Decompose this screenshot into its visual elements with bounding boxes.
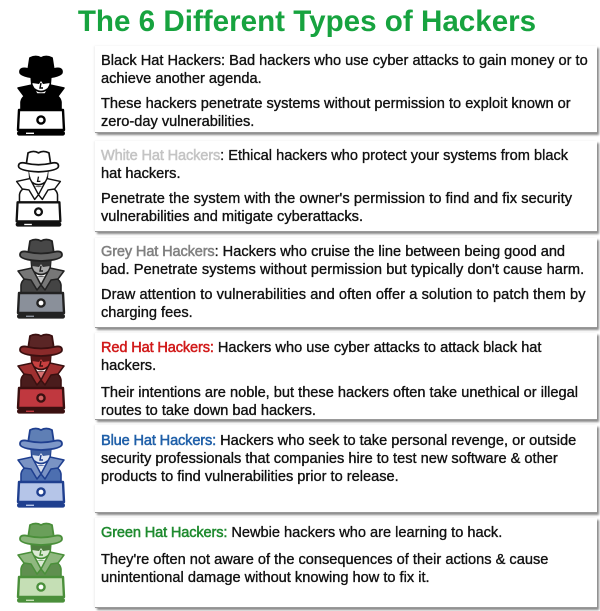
text: blue hat description: products to find vulnerabilities prior to release.: [101, 469, 399, 485]
text: black hat methods: [101, 96, 571, 130]
text: black hat description: [101, 53, 588, 87]
icon: black hacker: [16, 56, 66, 136]
icon: blue hacker: [16, 428, 66, 508]
icon: green hacker: [16, 522, 66, 603]
text: red hat methods: routes to take down bad hackers.: [101, 403, 316, 419]
text: grey hat description: bad. Penetrate systems without permission but typically don't cause harm.: [101, 262, 584, 278]
text: red hat methods: [101, 385, 578, 419]
panel: blue hat: [95, 425, 597, 513]
text: white hat methods: Penetrate the system with the owner's permission to find and fix security: [101, 191, 572, 207]
text: white hat description: [100, 148, 568, 182]
text: grey hat methods: charging fees.: [101, 305, 193, 321]
text: blue hat description: Blue Hat Hackers: Hackers who seek to take personal revenge, or outside: [101, 433, 576, 449]
text: red hat description: [101, 340, 542, 374]
text: grey hat description: [101, 244, 584, 278]
text: green hat methods: They're often not aware of the consequences of their actions & cause: [101, 552, 548, 568]
text: blue hat description: security professionals that companies hire to test new software & other: [101, 451, 558, 467]
text: black hat methods: These hackers penetrate systems without permission to exploit known or: [101, 96, 571, 112]
icon: white hacker: [16, 150, 62, 227]
title: The 6 Different Types of Hackers: [78, 5, 536, 38]
text: blue hat description: [101, 433, 576, 485]
text: grey hat methods: [101, 287, 586, 321]
panel: white hat: [95, 141, 597, 232]
text: green hat methods: unintentional damage without knowing how to fix it.: [101, 570, 430, 586]
text: white hat description: White Hat Hackers: Ethical hackers who protect your systems from black: [101, 148, 568, 164]
text: grey hat methods: Draw attention to vulnerabilities and often offer a solution to patch them by: [101, 287, 586, 303]
panel: green hat: [95, 518, 597, 608]
text: red hat description: hackers.: [101, 358, 156, 374]
panel: black hat: [95, 46, 597, 133]
text: grey hat description: Grey Hat Hackers: Hackers who cruise the line between being good and: [101, 244, 565, 260]
text: white hat description: hat hackers.: [101, 166, 180, 182]
text: red hat description: Red Hat Hackers: Hackers who use cyber attacks to attack black hat: [101, 340, 541, 356]
text: white hat methods: [100, 191, 572, 225]
panel: grey hat: [95, 238, 597, 328]
text: green hat methods: [101, 552, 548, 586]
text: white hat methods: vulnerabilities and mitigate cyberattacks.: [101, 209, 363, 225]
text: red hat methods: Their intentions are noble, but these hackers often take unethical or illegal: [101, 385, 578, 401]
text: black hat description: achieve another agenda.: [101, 71, 262, 87]
text: green hat description: Green Hat Hackers: Newbie hackers who are learning to hack.: [101, 525, 502, 541]
text: black hat methods: zero-day vulnerabilities.: [101, 114, 254, 130]
icon: red hacker: [16, 334, 66, 414]
text: black hat description: Black Hat Hackers: Bad hackers who use cyber attacks to gain money or to: [101, 53, 588, 69]
panel: red hat: [95, 333, 597, 420]
icon: grey hacker: [16, 238, 66, 319]
